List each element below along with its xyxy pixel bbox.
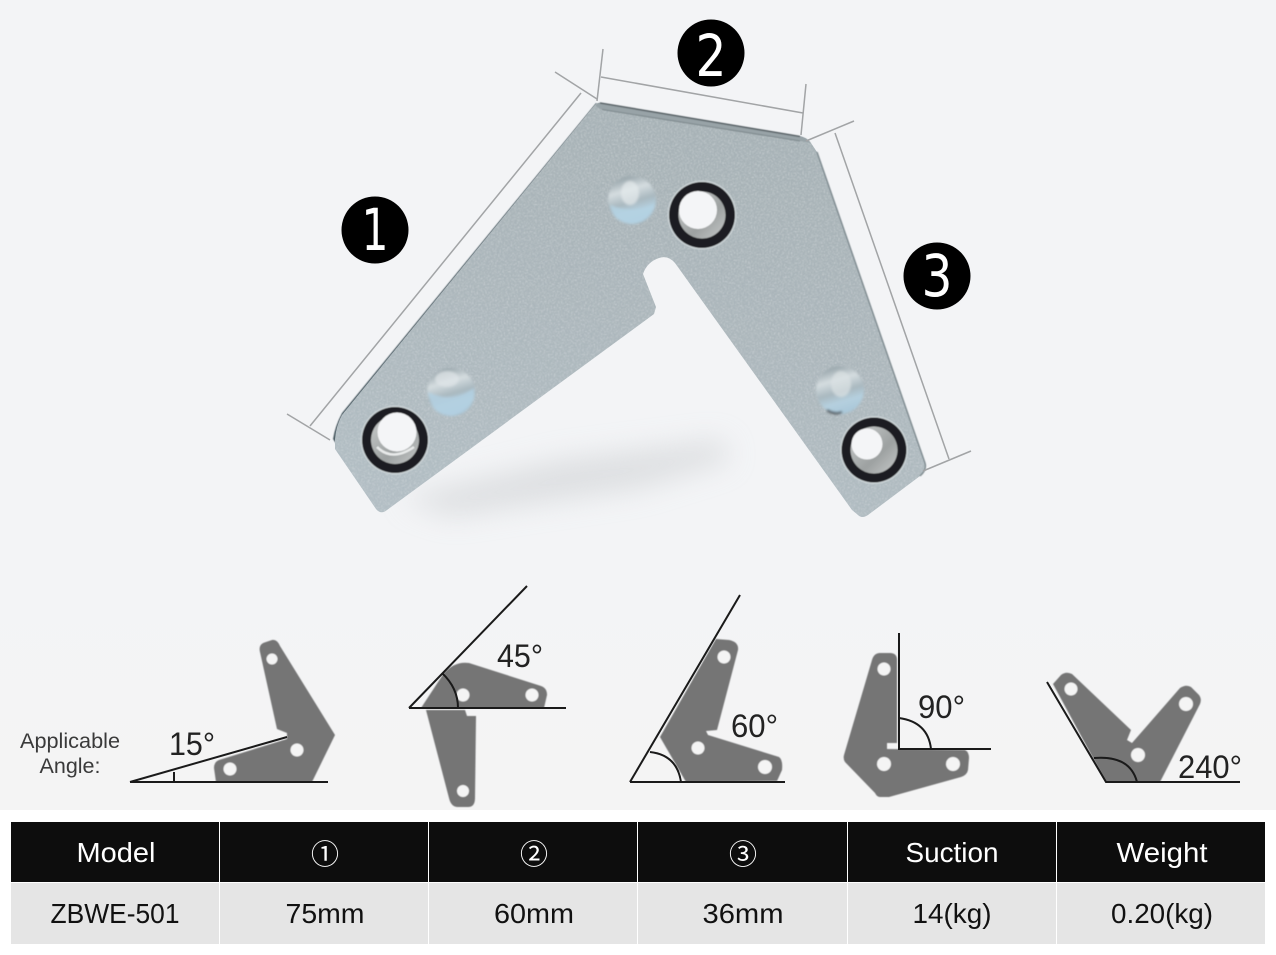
angle lines — [899, 633, 991, 749]
rivet: right — [816, 366, 864, 414]
plate body — [335, 103, 925, 517]
angle lines — [130, 737, 328, 782]
angle diagram: 90 degrees — [844, 633, 991, 797]
data row: ZBWE-501 — [50, 898, 180, 929]
applicable angle label — [20, 730, 120, 778]
dimension line 2 — [597, 49, 806, 135]
plate silhouette — [844, 653, 969, 797]
dimension line 3 — [806, 121, 971, 471]
angle diagram: 15 degrees — [130, 640, 335, 782]
data row: 36mm — [702, 898, 784, 929]
applicable angle label: Angle: — [40, 755, 100, 778]
plate silhouette — [214, 640, 335, 782]
angle value: 15° — [169, 726, 215, 762]
angle diagram: 45 degrees — [409, 586, 566, 807]
applicable angle label: Applicable — [20, 730, 120, 753]
angle arc — [650, 752, 681, 782]
top panel background — [0, 0, 1276, 560]
badge 1 — [342, 196, 408, 264]
badge 1: 1 — [362, 196, 388, 264]
angle value: 240° — [1178, 749, 1242, 785]
rivet: top — [608, 176, 656, 224]
product illustration: magnetic angle holder — [287, 20, 971, 517]
angle value: 60° — [731, 708, 778, 744]
badge 3 — [904, 242, 970, 310]
header row — [11, 822, 1265, 882]
lower plate silhouette — [426, 710, 476, 807]
specification table — [11, 822, 1265, 944]
plate top bevel — [595, 103, 811, 143]
badge 2 — [678, 20, 744, 90]
hole: top — [668, 180, 736, 250]
header row: Suction — [906, 837, 998, 868]
data row — [11, 883, 1265, 944]
data row: 14(kg) — [912, 898, 992, 929]
angle lines — [1047, 682, 1240, 782]
plate silhouette — [1053, 673, 1201, 782]
plate shadow — [400, 440, 730, 516]
angle lines — [409, 586, 566, 708]
angle lines — [630, 595, 785, 782]
angle arc — [899, 718, 931, 749]
header row: Weight — [1116, 837, 1208, 868]
header row: Model — [76, 837, 156, 868]
data row: 60mm — [494, 898, 574, 929]
dimension line 1 — [287, 72, 597, 440]
header row: ③ — [729, 833, 757, 873]
badge 3: 3 — [922, 242, 952, 310]
plate right edge — [817, 152, 925, 476]
badge 2: 2 — [696, 22, 726, 90]
hole: left — [360, 406, 430, 474]
angle diagram: 240 degrees — [1047, 673, 1242, 785]
header row: ① — [311, 833, 339, 873]
hole: right — [840, 416, 908, 484]
angle arc — [442, 673, 458, 708]
rivet: left — [427, 368, 475, 416]
data row: 0.20(kg) — [1111, 898, 1213, 929]
plate silhouette — [660, 639, 782, 782]
upper plate silhouette — [421, 663, 547, 708]
header row: ② — [520, 833, 548, 873]
data row: 75mm — [286, 898, 364, 929]
angle diagram: 60 degrees — [630, 595, 785, 782]
angle arc — [1094, 758, 1137, 782]
angle panel background — [0, 560, 1276, 810]
angle value: 90° — [918, 689, 965, 725]
plate dark edge — [333, 103, 600, 447]
angle value: 45° — [497, 638, 543, 674]
